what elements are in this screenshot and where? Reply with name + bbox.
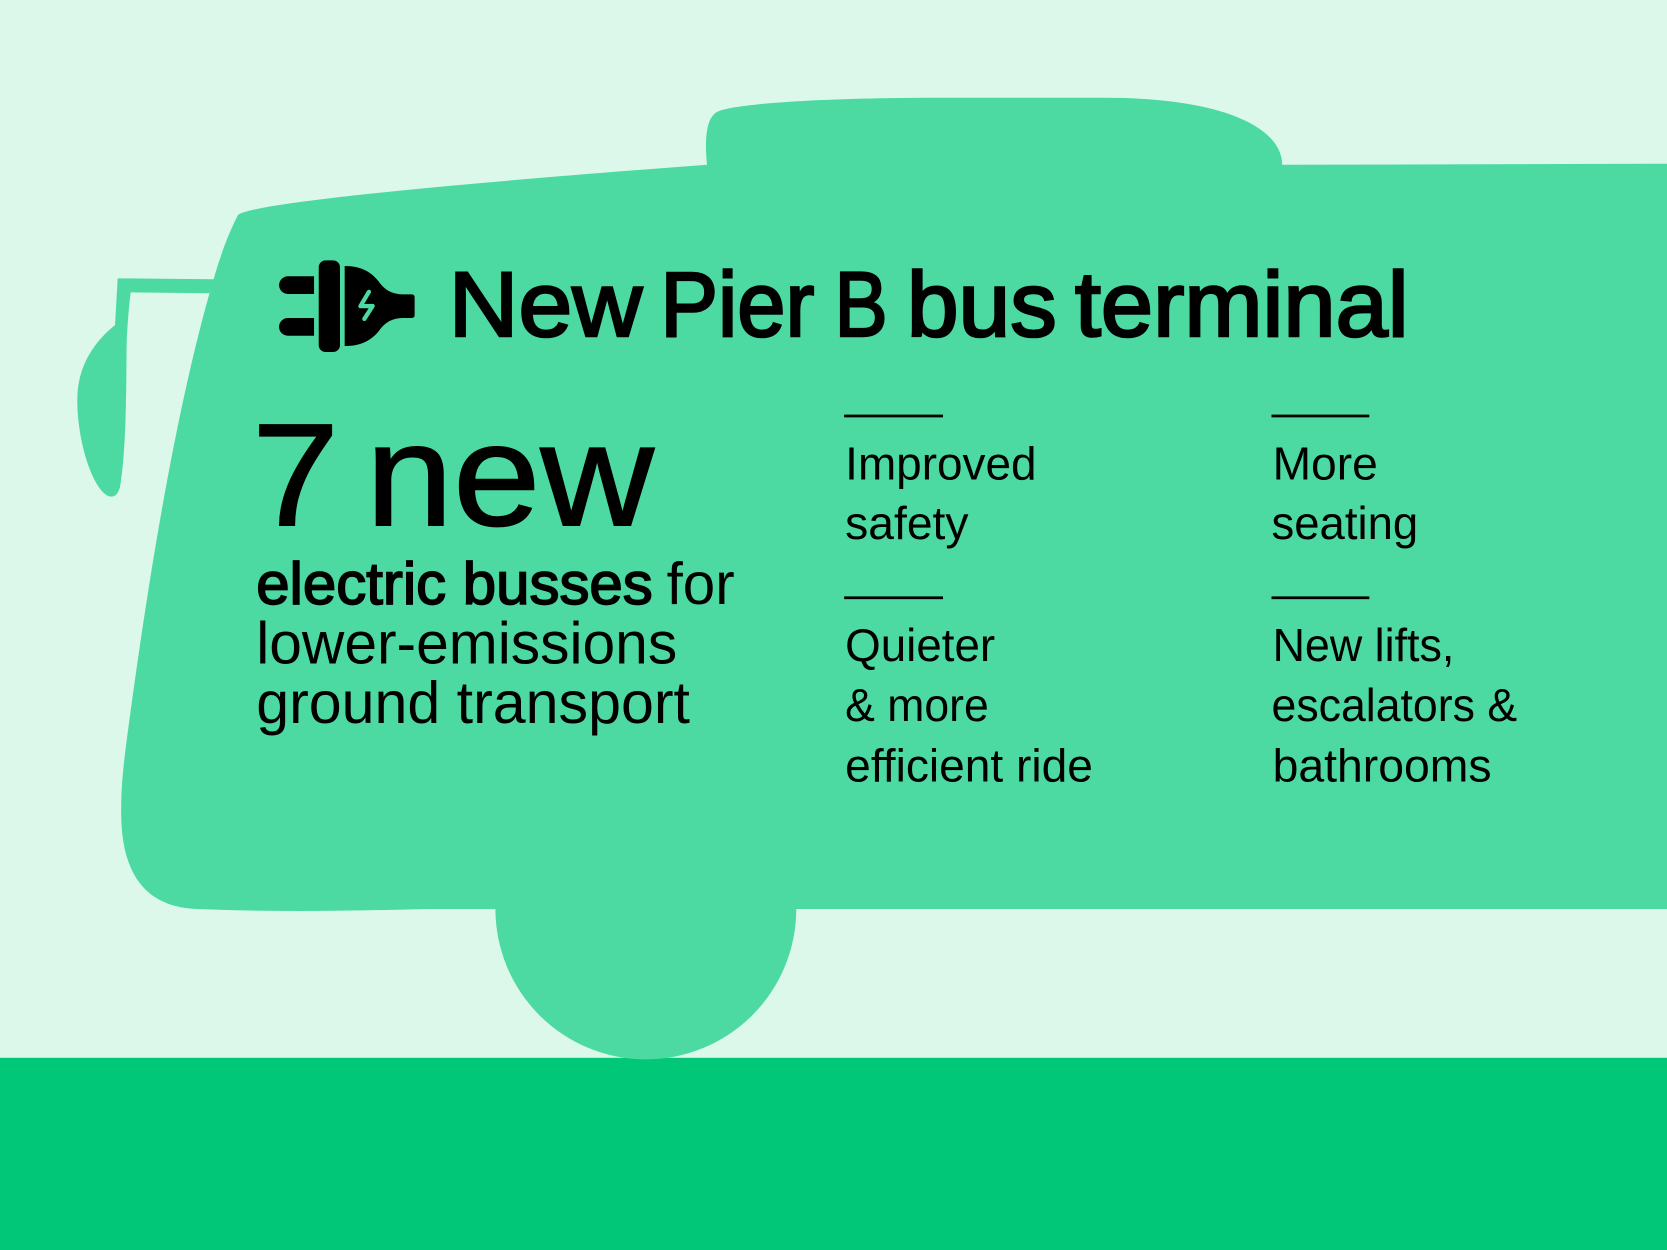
description line 3: ground transport: [256, 669, 690, 736]
plug prong top: [279, 276, 314, 294]
headline stat: 7: [252, 393, 339, 556]
side mirror: [77, 278, 214, 497]
headline stat: new: [366, 393, 655, 556]
title: Pier: [660, 254, 814, 356]
benefit: more seating: seating: [1272, 497, 1418, 549]
title: bus: [907, 254, 1057, 356]
plug bar: [319, 260, 340, 352]
description line 1 regular: for: [667, 550, 735, 617]
benefit: new lifts, escalators and bathrooms: [1272, 596, 1517, 791]
title: B: [835, 254, 888, 356]
benefit: more seating: More: [1273, 437, 1378, 489]
ground band: [0, 1058, 1667, 1250]
benefit: improved safety: [844, 415, 1037, 549]
benefit: new lifts, escalators and bathrooms: escalators &: [1272, 679, 1517, 731]
description line 2: lower-emissions: [256, 609, 677, 676]
stat description: [256, 550, 735, 736]
title: [449, 254, 1409, 356]
benefit: more seating: [1272, 415, 1418, 549]
benefit: improved safety: safety: [845, 497, 969, 549]
plug prong bottom: [279, 318, 314, 336]
benefit: new lifts, escalators and bathrooms: bathrooms: [1273, 739, 1492, 791]
benefit: quieter and more efficient ride: & more: [845, 679, 989, 731]
bus silhouette: [77, 98, 1667, 1059]
plug head: [345, 266, 415, 346]
headline stat: [252, 393, 655, 556]
benefit: new lifts, escalators and bathrooms: New lifts,: [1273, 619, 1454, 671]
description line 1 bold: electric busses: [256, 550, 653, 617]
icon: electric plug: [279, 260, 415, 352]
lightning bolt: [360, 292, 373, 319]
benefit: quieter and more efficient ride: [844, 596, 1093, 791]
benefit: quieter and more efficient ride: Quieter: [845, 619, 995, 671]
benefit: quieter and more efficient ride: efficient ride: [845, 739, 1093, 791]
bus body with wheel: [121, 98, 1667, 1059]
benefit: improved safety: Improved: [845, 437, 1037, 489]
title: terminal: [1075, 254, 1409, 356]
title: New: [449, 254, 643, 356]
